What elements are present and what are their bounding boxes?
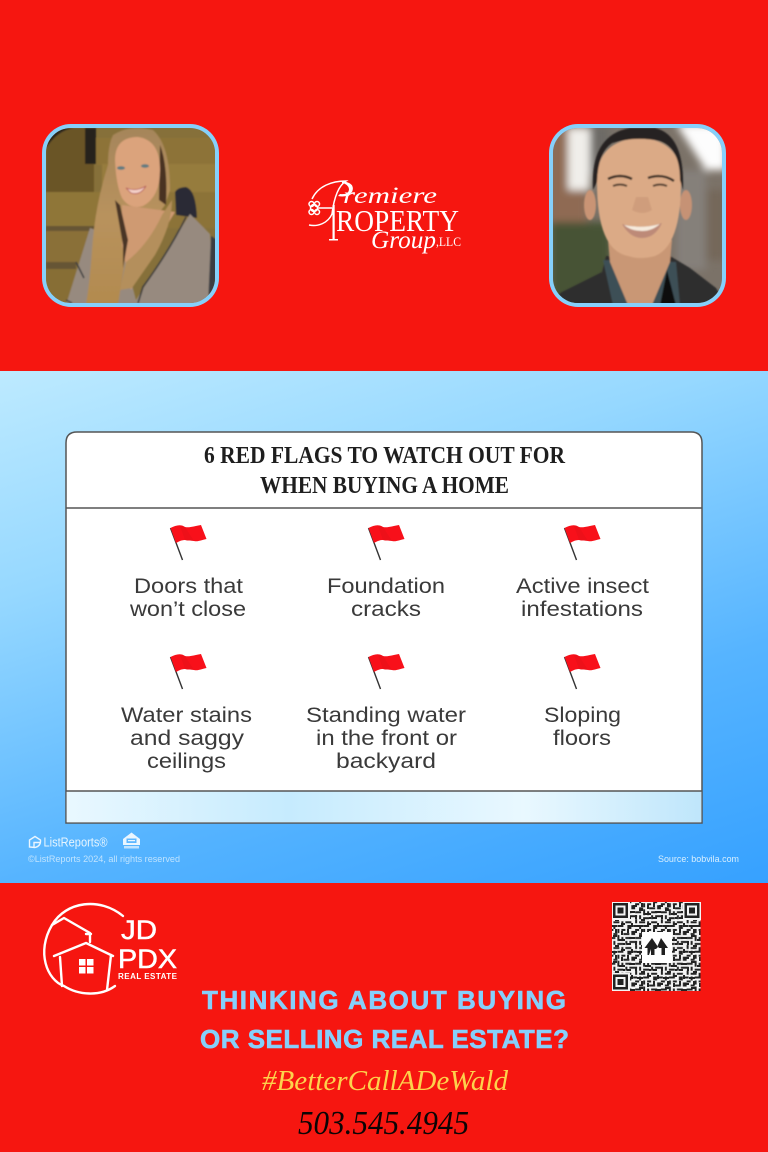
item: sloping floors: Sloping xyxy=(544,704,621,727)
call to action headline xyxy=(200,985,569,1054)
logo: JD PDX Real Estate xyxy=(44,904,178,994)
icon: houses in circle xyxy=(44,904,123,994)
item: standing water: Standing water xyxy=(306,704,466,727)
photo: woman agent xyxy=(42,124,219,307)
item: foundation: cracks xyxy=(351,598,421,621)
icon: equal housing xyxy=(123,832,140,848)
call to action headline: OR SELLING REAL ESTATE? xyxy=(200,1024,569,1054)
phone number: 503.545.4945 xyxy=(298,1105,469,1142)
item: insects: infestations xyxy=(521,598,643,621)
icon: double arrow xyxy=(644,938,668,955)
item: standing water: backyard xyxy=(336,750,436,773)
icon: key xyxy=(309,181,346,226)
heading: 6 RED FLAGS TO WATCH OUT FOR xyxy=(204,443,566,469)
item: insects: Active insect xyxy=(516,575,649,598)
hashtag: #BetterCallADeWald xyxy=(262,1065,508,1097)
icon: red flag xyxy=(564,525,600,560)
icon: red flag xyxy=(564,654,600,689)
panel: top red banner xyxy=(42,124,726,307)
heading: WHEN BUYING A HOME xyxy=(260,473,509,499)
logo: Premiere Property Group xyxy=(309,181,461,254)
item: water stains xyxy=(121,654,252,773)
logo: Premiere Property Group: ,LLC xyxy=(436,234,461,249)
item: standing water xyxy=(306,654,466,773)
item: doors xyxy=(129,525,246,621)
item: foundation xyxy=(327,525,445,621)
icon: red flag xyxy=(368,654,404,689)
item: insects xyxy=(516,525,649,621)
item: doors: won’t close xyxy=(129,598,246,621)
branding: ListReports: ListReports® xyxy=(44,836,108,850)
branding: ListReports xyxy=(28,832,180,865)
item: foundation: Foundation xyxy=(327,575,445,598)
item: standing water: in the front or xyxy=(316,727,457,750)
branding: ListReports: ©ListReports 2024, all rights reserved xyxy=(28,854,180,865)
item: water stains: ceilings xyxy=(147,750,226,773)
logo: Premiere Property Group: Group xyxy=(371,227,436,254)
item: doors: Doors that xyxy=(134,575,243,598)
icon: window xyxy=(79,959,94,974)
icon: red flag xyxy=(170,525,206,560)
QR code xyxy=(612,902,701,991)
panel: bottom red banner xyxy=(0,883,768,1152)
panel: blue gradient content area xyxy=(0,371,768,883)
icon: red flag xyxy=(170,654,206,689)
icon: red flag xyxy=(368,525,404,560)
item: sloping floors: floors xyxy=(553,727,611,750)
item: water stains: and saggy xyxy=(130,727,245,750)
photo: man agent xyxy=(549,124,726,312)
heading xyxy=(204,443,566,499)
item: water stains: Water stains xyxy=(121,704,252,727)
source note: Source: bobvila.com xyxy=(658,854,739,865)
icon: ListReports mark xyxy=(30,836,41,848)
card: red flags list xyxy=(66,432,702,823)
call to action headline: THINKING ABOUT BUYING xyxy=(202,985,566,1015)
item: sloping floors xyxy=(544,654,621,750)
logo: Premiere Property Group: ROPERTY xyxy=(336,203,459,238)
logo: JD PDX Real Estate: PDX xyxy=(118,944,177,974)
logo: Premiere Property Group: remiere xyxy=(343,183,437,208)
logo: JD PDX Real Estate: REAL ESTATE xyxy=(118,972,178,981)
logo: JD PDX Real Estate: JD xyxy=(121,915,157,945)
